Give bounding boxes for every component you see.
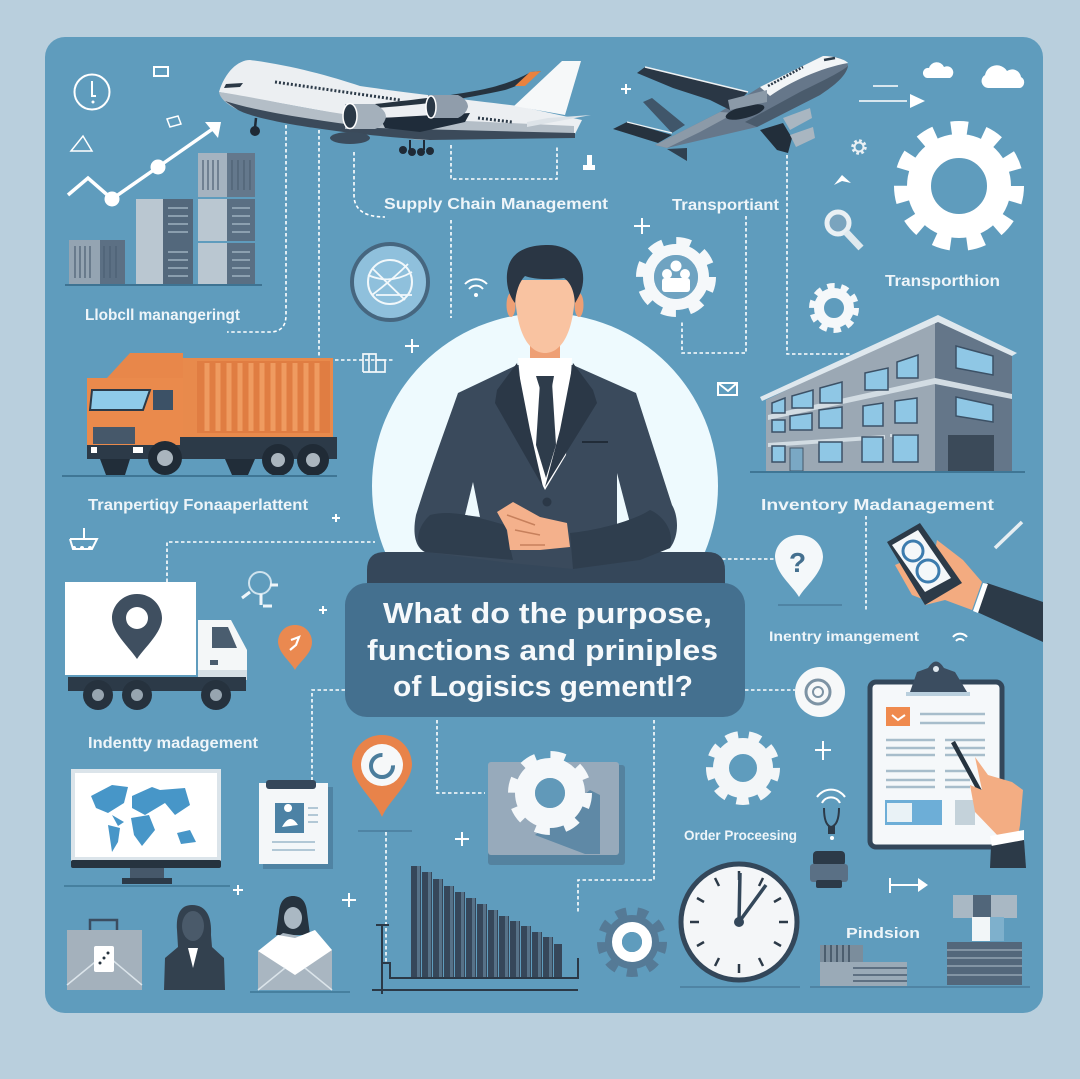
desk behind figure xyxy=(367,552,725,590)
icon: sparkle near label xyxy=(634,218,650,234)
icon: map pin question: ? xyxy=(789,547,806,578)
icon: large gear xyxy=(903,130,1015,242)
icon: small mail near circle xyxy=(718,383,737,395)
icon: arrow right bottom xyxy=(890,878,928,893)
icon: wall clock xyxy=(680,864,800,987)
icon: small battery xyxy=(154,67,168,76)
icon: medium gear xyxy=(813,287,855,329)
icon: map pin question xyxy=(775,535,842,605)
heading: title text: of Logisics gementl? xyxy=(393,671,693,703)
icon: rising line chart xyxy=(68,122,221,206)
icon: small sparkle xyxy=(621,84,631,94)
icon: gear on grey panel xyxy=(488,757,625,865)
icon: orange location pin xyxy=(352,735,412,831)
icon: silhouette person xyxy=(164,905,225,990)
icon: stacked boxes xyxy=(810,895,1030,987)
icon: clock top left xyxy=(74,74,110,110)
icon: orange pin small xyxy=(278,625,312,670)
icon: chevron xyxy=(834,175,851,185)
icon: businessman figure xyxy=(414,245,677,569)
icon: plus bottom xyxy=(342,893,356,907)
icon: small plus left xyxy=(332,514,340,522)
icon: white delivery truck with pin xyxy=(65,582,247,710)
icon: clipboard with hand xyxy=(870,662,1026,868)
icon: small plus near pin xyxy=(319,606,327,614)
icon: headset person xyxy=(242,572,278,606)
icon: right arrow xyxy=(859,86,925,108)
icon: plus center xyxy=(455,832,469,846)
icon: briefcase xyxy=(67,920,142,990)
icon: clouds xyxy=(923,62,1024,88)
label: inventory management left: Indentty madagement xyxy=(88,735,259,752)
label: transportation management: Tranpertiqy Fonaaperlattent xyxy=(88,497,309,514)
icon: gear with people xyxy=(642,243,710,311)
label: logistics managing: Llobcll manangeringt xyxy=(85,307,241,324)
label: transportation: Transporthion xyxy=(885,273,1000,290)
icon: small plus lower left xyxy=(233,885,243,895)
icon: monitor with world map xyxy=(64,769,230,886)
icon: globe magnifier xyxy=(352,244,428,320)
icon: printer xyxy=(810,851,848,888)
icon: wifi right xyxy=(953,634,967,641)
icon: document card xyxy=(259,780,333,869)
icon: stacked containers xyxy=(65,153,262,285)
label: order processing: Order Proceesing xyxy=(684,827,797,843)
icon: gear center right xyxy=(712,737,774,799)
chart: falling bars xyxy=(372,866,578,994)
label: supply chain management: Supply Chain Management xyxy=(384,196,609,213)
icon: building xyxy=(750,315,1025,472)
icon: shopping cart xyxy=(70,528,97,550)
label: inventry management: Inentry imangement xyxy=(769,628,919,644)
icon: small plus xyxy=(405,339,419,353)
icon: gear by clock xyxy=(603,913,661,971)
heading: title text: What do the purpose, xyxy=(383,598,712,630)
icon: envelope with person xyxy=(250,896,350,992)
icon: wifi xyxy=(465,279,487,297)
icon: bars glyph xyxy=(363,354,385,372)
icon: dial button xyxy=(795,667,845,717)
label: pindsion: Pindsion xyxy=(846,925,920,942)
heading: title text xyxy=(367,598,718,703)
icon: orange truck xyxy=(62,353,337,476)
connector lines xyxy=(167,125,866,962)
panel: question box xyxy=(345,583,745,717)
icon: person stamp xyxy=(583,155,595,170)
central white circle xyxy=(372,313,718,659)
icon: small plus center right xyxy=(815,741,831,760)
label: transportiant: Transportiant xyxy=(672,197,780,214)
icon: wifi tag xyxy=(817,790,845,840)
label: inventory management right: Inventory Madanagement xyxy=(761,497,995,514)
icon: small gear top xyxy=(853,141,865,153)
icon: magnifier xyxy=(827,212,861,248)
icon: pen xyxy=(995,522,1022,548)
icon: hand holding phone xyxy=(887,523,1043,642)
heading: title text: functions and priniples xyxy=(367,635,718,667)
icon: small mail xyxy=(167,116,181,127)
icon: small triangle xyxy=(71,136,92,151)
icon: airplane right xyxy=(613,56,848,161)
icon: airplane left xyxy=(219,60,591,156)
